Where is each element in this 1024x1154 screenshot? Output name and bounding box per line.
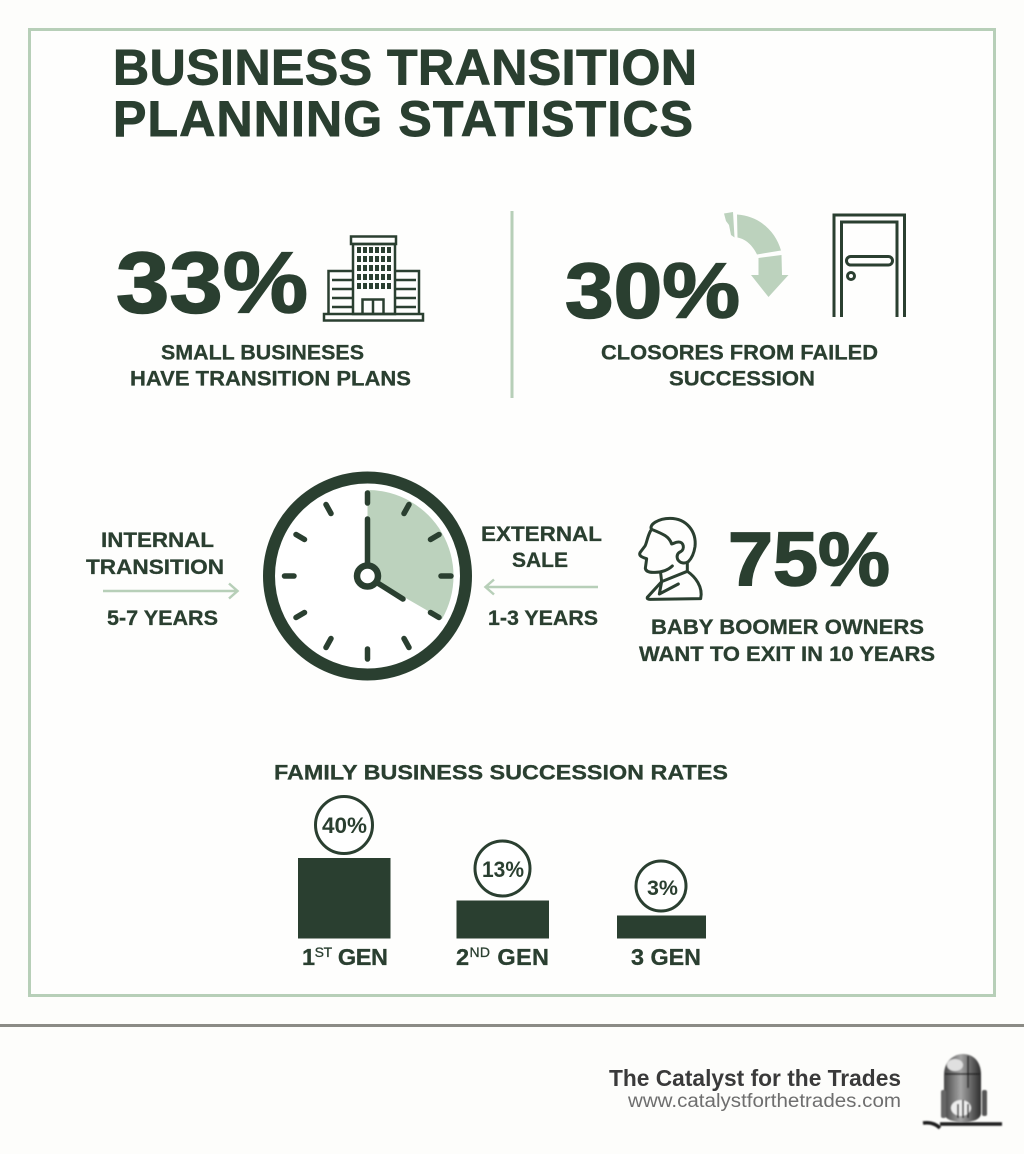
footer: brand text: [609, 1065, 901, 1112]
stat: 33%: 33%: [116, 236, 308, 332]
bar: 2nd gen: ND: [469, 944, 490, 960]
label: SALE: [512, 549, 568, 572]
bar: 1st gen: GEN: [332, 944, 388, 970]
footer: brand text: www.catalystforthetrades.com: [627, 1091, 901, 1112]
clock hub: [357, 566, 378, 586]
icon: door: [834, 215, 904, 317]
label: [481, 523, 602, 572]
stat: 75%: 75%: [728, 518, 890, 602]
panel: 30% closures: [565, 212, 904, 390]
bar: 1st gen: 40%: [322, 813, 367, 838]
label: [130, 342, 411, 390]
label: [86, 529, 224, 579]
bar: 3rd gen: 3%: [647, 877, 678, 900]
label: CLOSORES FROM FAILED: [601, 342, 878, 364]
clock hands: [368, 519, 403, 599]
shaded sector: [368, 490, 454, 619]
arrow: left: [486, 580, 598, 594]
panel: internal transition: [86, 529, 238, 630]
clock face: [269, 478, 466, 674]
icon: office building: [324, 236, 423, 320]
panel: 75% baby boomer owners: [639, 518, 935, 666]
bar: 2nd gen: [456, 841, 549, 970]
footer: brand text: The Catalyst for the Trades: [609, 1065, 901, 1091]
bar: 2nd gen: 2: [456, 944, 469, 970]
bar: 2nd gen: 13%: [482, 857, 524, 882]
chart heading: FAMILY BUSINESS SUCCESSION RATES: [274, 762, 728, 784]
label: EXTERNAL: [481, 523, 602, 546]
label: HAVE TRANSITION PLANS: [130, 368, 411, 390]
title: [113, 40, 697, 147]
label: INTERNAL: [101, 529, 214, 552]
duration: 5-7 YEARS: [107, 607, 218, 630]
label: TRANSITION: [86, 556, 224, 579]
label: SUCCESSION: [669, 368, 815, 390]
label: [639, 616, 935, 666]
icon: person profile: [640, 518, 701, 599]
bar: 3rd gen: 3 GEN: [631, 944, 701, 970]
icon: broken downward arrow: [724, 212, 788, 297]
panel: family business succession rates: [274, 762, 728, 970]
stat: 30%: 30%: [565, 246, 740, 334]
tick marks: [284, 493, 451, 659]
icon: clock: [269, 478, 466, 674]
label: WANT TO EXIT IN 10 YEARS: [639, 643, 935, 666]
duration: 1-3 YEARS: [488, 607, 598, 630]
footer rule: [0, 1024, 1024, 1027]
infographic frame: [30, 30, 994, 996]
arrow: right: [103, 584, 238, 598]
icon: microphone logo: [923, 1054, 1002, 1128]
panel: 33% small businesses: [116, 236, 423, 390]
bar: 1st gen: ST: [315, 944, 333, 960]
title: BUSINESS TRANSITION: [113, 40, 697, 96]
bar: 1st gen: [298, 796, 390, 970]
vertical divider: [510, 211, 514, 398]
panel: external sale: [481, 523, 602, 630]
bar: 3rd gen: [617, 861, 706, 970]
bar: 2nd gen: GEN: [490, 944, 549, 970]
bar: 1st gen: 1: [302, 944, 315, 970]
label: BABY BOOMER OWNERS: [651, 616, 924, 639]
title: PLANNING STATISTICS: [113, 91, 693, 147]
label: [601, 342, 878, 390]
label: SMALL BUSINESES: [161, 342, 364, 364]
